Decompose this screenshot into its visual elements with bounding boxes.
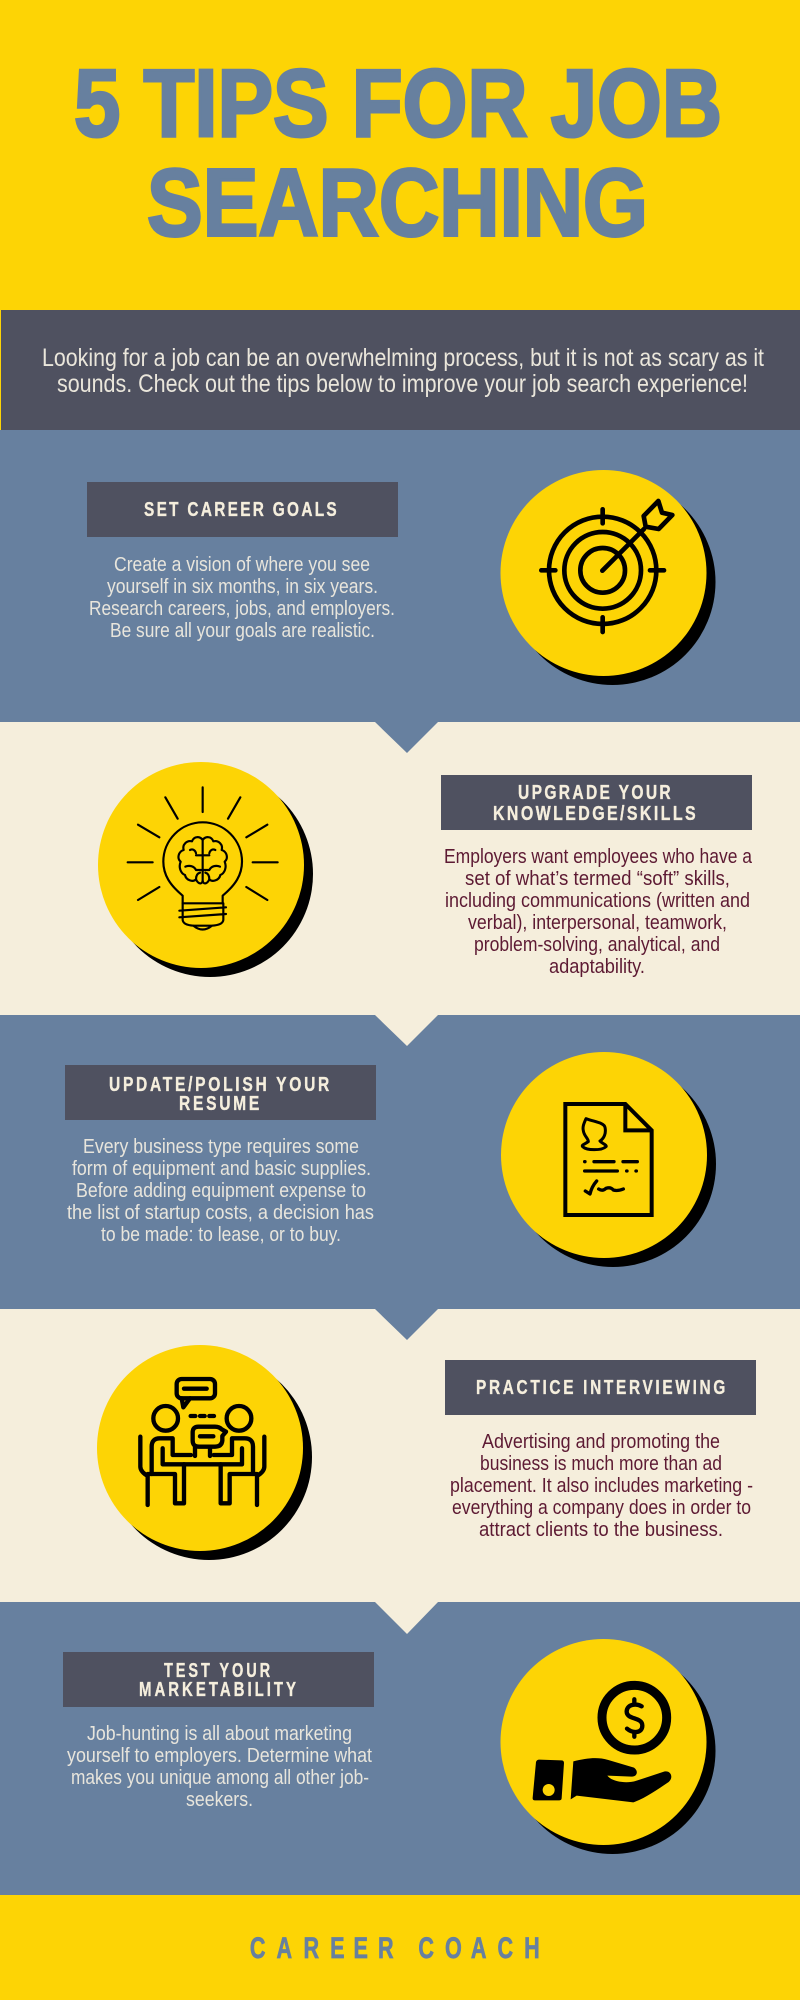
heading label: test marketability — [63, 1652, 374, 1707]
notch arrow — [375, 1602, 438, 1634]
icon: hand holding coin — [500, 1639, 716, 1854]
panel: set career goals — [0, 430, 800, 722]
intro band — [1, 310, 800, 430]
text block: practice interviewing: business is much more than ad — [480, 1453, 722, 1475]
icon: light bulb with brain — [98, 762, 313, 977]
notch arrow — [375, 1015, 438, 1046]
text block: update resume: the list of startup costs, a decision has — [67, 1202, 374, 1224]
footer band — [0, 1895, 800, 2000]
text block: set career goals: Be sure all your goals are realistic. — [110, 620, 375, 642]
text block: update resume — [67, 1136, 374, 1246]
text block: update resume: Every business type requires some — [83, 1136, 359, 1158]
text block: upgrade knowledge: problem-solving, analytical, and — [474, 934, 720, 956]
text block: test marketability: Job-hunting is all about marketing — [87, 1723, 352, 1745]
text block: set career goals: Create a vision of where you see — [114, 554, 370, 576]
title — [74, 50, 722, 256]
heading label: practice interviewing — [445, 1360, 756, 1415]
heading label: test marketability: TEST YOUR — [164, 1660, 273, 1682]
text block: practice interviewing: Advertising and promoting the — [482, 1431, 720, 1453]
icon: target with arrow — [500, 470, 716, 685]
text block: test marketability — [67, 1723, 372, 1811]
text block: update resume: form of equipment and basic supplies. — [72, 1158, 371, 1180]
text block: test marketability: yourself to employers. Determine what — [67, 1745, 372, 1767]
text block: upgrade knowledge: set of what’s termed “soft” skills, — [465, 868, 730, 890]
heading label: set career goals: SET CAREER GOALS — [144, 499, 339, 521]
heading label: test marketability: MARKETABILITY — [139, 1679, 299, 1701]
panel: upgrade your knowledge — [0, 722, 800, 1015]
icon: two people talking at a table — [97, 1345, 312, 1560]
text block: set career goals: Research careers, jobs, and employers. — [89, 598, 395, 620]
heading label: upgrade knowledge: KNOWLEDGE/SKILLS — [493, 803, 698, 825]
heading label: practice interviewing: PRACTICE INTERVIEWING — [476, 1377, 728, 1399]
text block: practice interviewing: everything a company does in order to — [452, 1497, 751, 1519]
panel: practice interviewing — [0, 1309, 800, 1602]
header band — [0, 0, 800, 311]
panel: test your marketability — [0, 1602, 800, 1895]
text block: set career goals — [89, 554, 395, 642]
text block: upgrade knowledge — [444, 846, 753, 978]
text block: set career goals: yourself in six months, in six years. — [107, 576, 378, 598]
title: 5 TIPS FOR JOB — [74, 50, 722, 157]
heading label: update resume — [65, 1065, 376, 1120]
text block: update resume: to be made: to lease, or to buy. — [101, 1224, 341, 1246]
heading label: upgrade knowledge — [441, 775, 752, 830]
notch arrow — [375, 722, 438, 753]
panel: update resume — [0, 1015, 800, 1309]
icon: resume document — [501, 1052, 716, 1267]
text block: test marketability: seekers. — [186, 1789, 253, 1811]
text block: upgrade knowledge: verbal), interpersonal, teamwork, — [468, 912, 727, 934]
text block: upgrade knowledge: adaptability. — [549, 956, 645, 978]
text block: practice interviewing — [450, 1431, 753, 1541]
heading label: set career goals — [87, 482, 398, 537]
intro text — [42, 344, 764, 398]
text block: upgrade knowledge: Employers want employees who have a — [444, 846, 753, 868]
notch arrow — [375, 1309, 438, 1340]
text block: test marketability: makes you unique among all other job- — [71, 1767, 369, 1789]
heading label: update resume: RESUME — [179, 1093, 262, 1115]
title: SEARCHING — [147, 150, 648, 256]
text block: upgrade knowledge: including communications (written and — [445, 890, 750, 912]
heading label: update resume: UPDATE/POLISH YOUR — [109, 1074, 332, 1096]
text block: practice interviewing: attract clients to the business. — [479, 1519, 723, 1541]
text block: practice interviewing: placement. It also includes marketing - — [450, 1475, 753, 1497]
text block: update resume: Before adding equipment expense to — [76, 1180, 366, 1202]
heading label: upgrade knowledge: UPGRADE YOUR — [518, 782, 673, 804]
footer text: CAREER COACH — [250, 1930, 540, 1965]
